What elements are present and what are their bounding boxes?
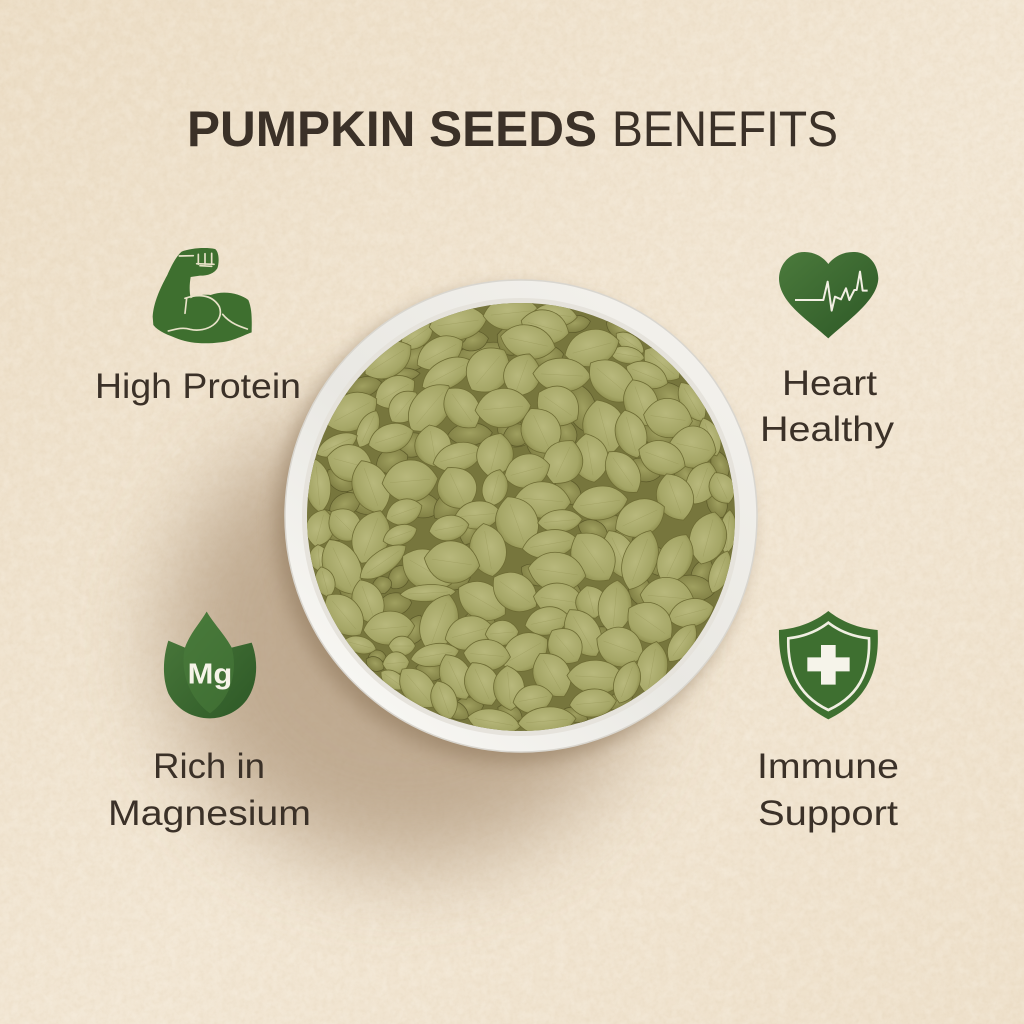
benefit: high protein	[95, 248, 301, 406]
label: Rich in	[153, 747, 265, 786]
label: Support	[758, 794, 898, 833]
title: BENEFITS	[612, 101, 838, 157]
label	[757, 747, 899, 833]
icon: heart with pulse	[779, 252, 878, 338]
all seeds, clipped to the bowl	[302, 293, 741, 739]
benefit: rich in magnesium	[108, 612, 311, 833]
bowl shadow	[165, 415, 645, 865]
benefit: immune support	[757, 611, 899, 833]
bowl of pumpkin seeds	[276, 280, 757, 762]
front layer of seeds	[302, 293, 741, 739]
bowl contact shadow	[276, 288, 750, 762]
icon: leaf with Mg: Mg	[188, 659, 232, 691]
title: PUMPKIN SEEDS	[187, 101, 597, 157]
label	[760, 364, 895, 449]
label: Magnesium	[108, 794, 311, 833]
seed bed	[307, 303, 735, 731]
bowl inner wall	[302, 298, 740, 736]
benefit: heart healthy	[760, 252, 895, 449]
back layer of seeds	[311, 313, 733, 726]
label: Healthy	[760, 410, 895, 449]
label: Heart	[782, 364, 877, 403]
icon: leaf with Mg	[164, 612, 256, 718]
label: Immune	[757, 747, 899, 786]
title	[187, 101, 838, 157]
label	[108, 747, 311, 833]
icon: shield with cross	[779, 611, 878, 719]
bowl rim	[285, 280, 757, 752]
icon: flexed arm	[153, 248, 252, 343]
label: High Protein	[95, 367, 301, 406]
